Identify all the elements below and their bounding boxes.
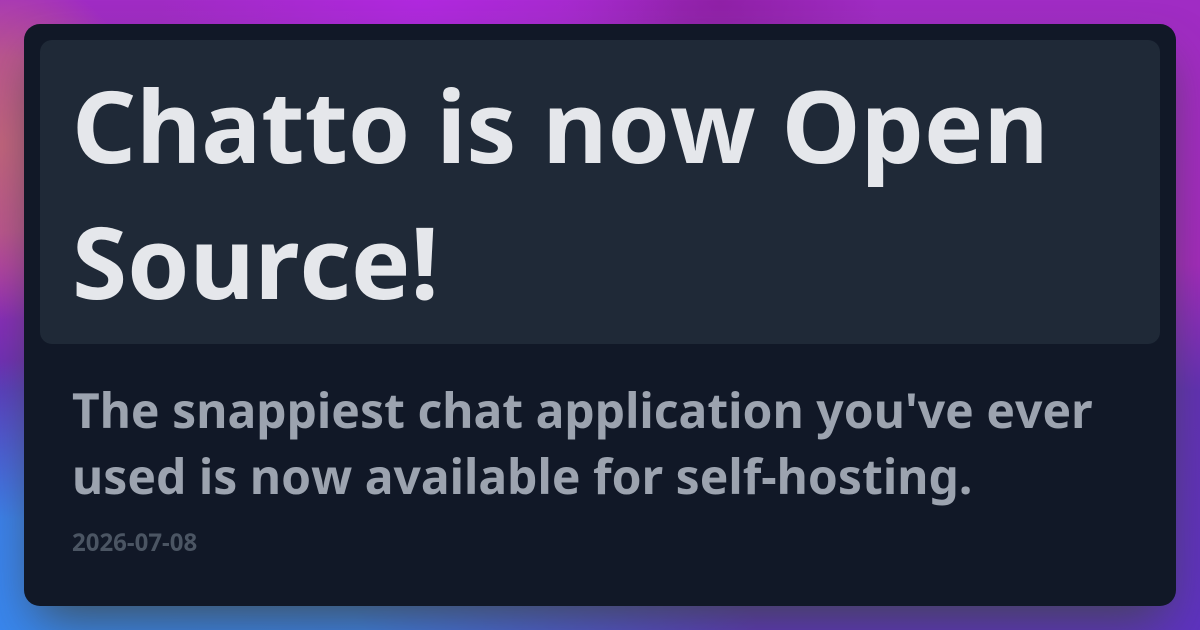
date: 2026-07-08	[72, 526, 197, 559]
title: Chatto is now Open Source!	[72, 57, 1049, 329]
subtitle: The snappiest chat application you've ever used is now available for self-hosting.	[72, 378, 1093, 509]
panel: title background	[40, 40, 1160, 344]
